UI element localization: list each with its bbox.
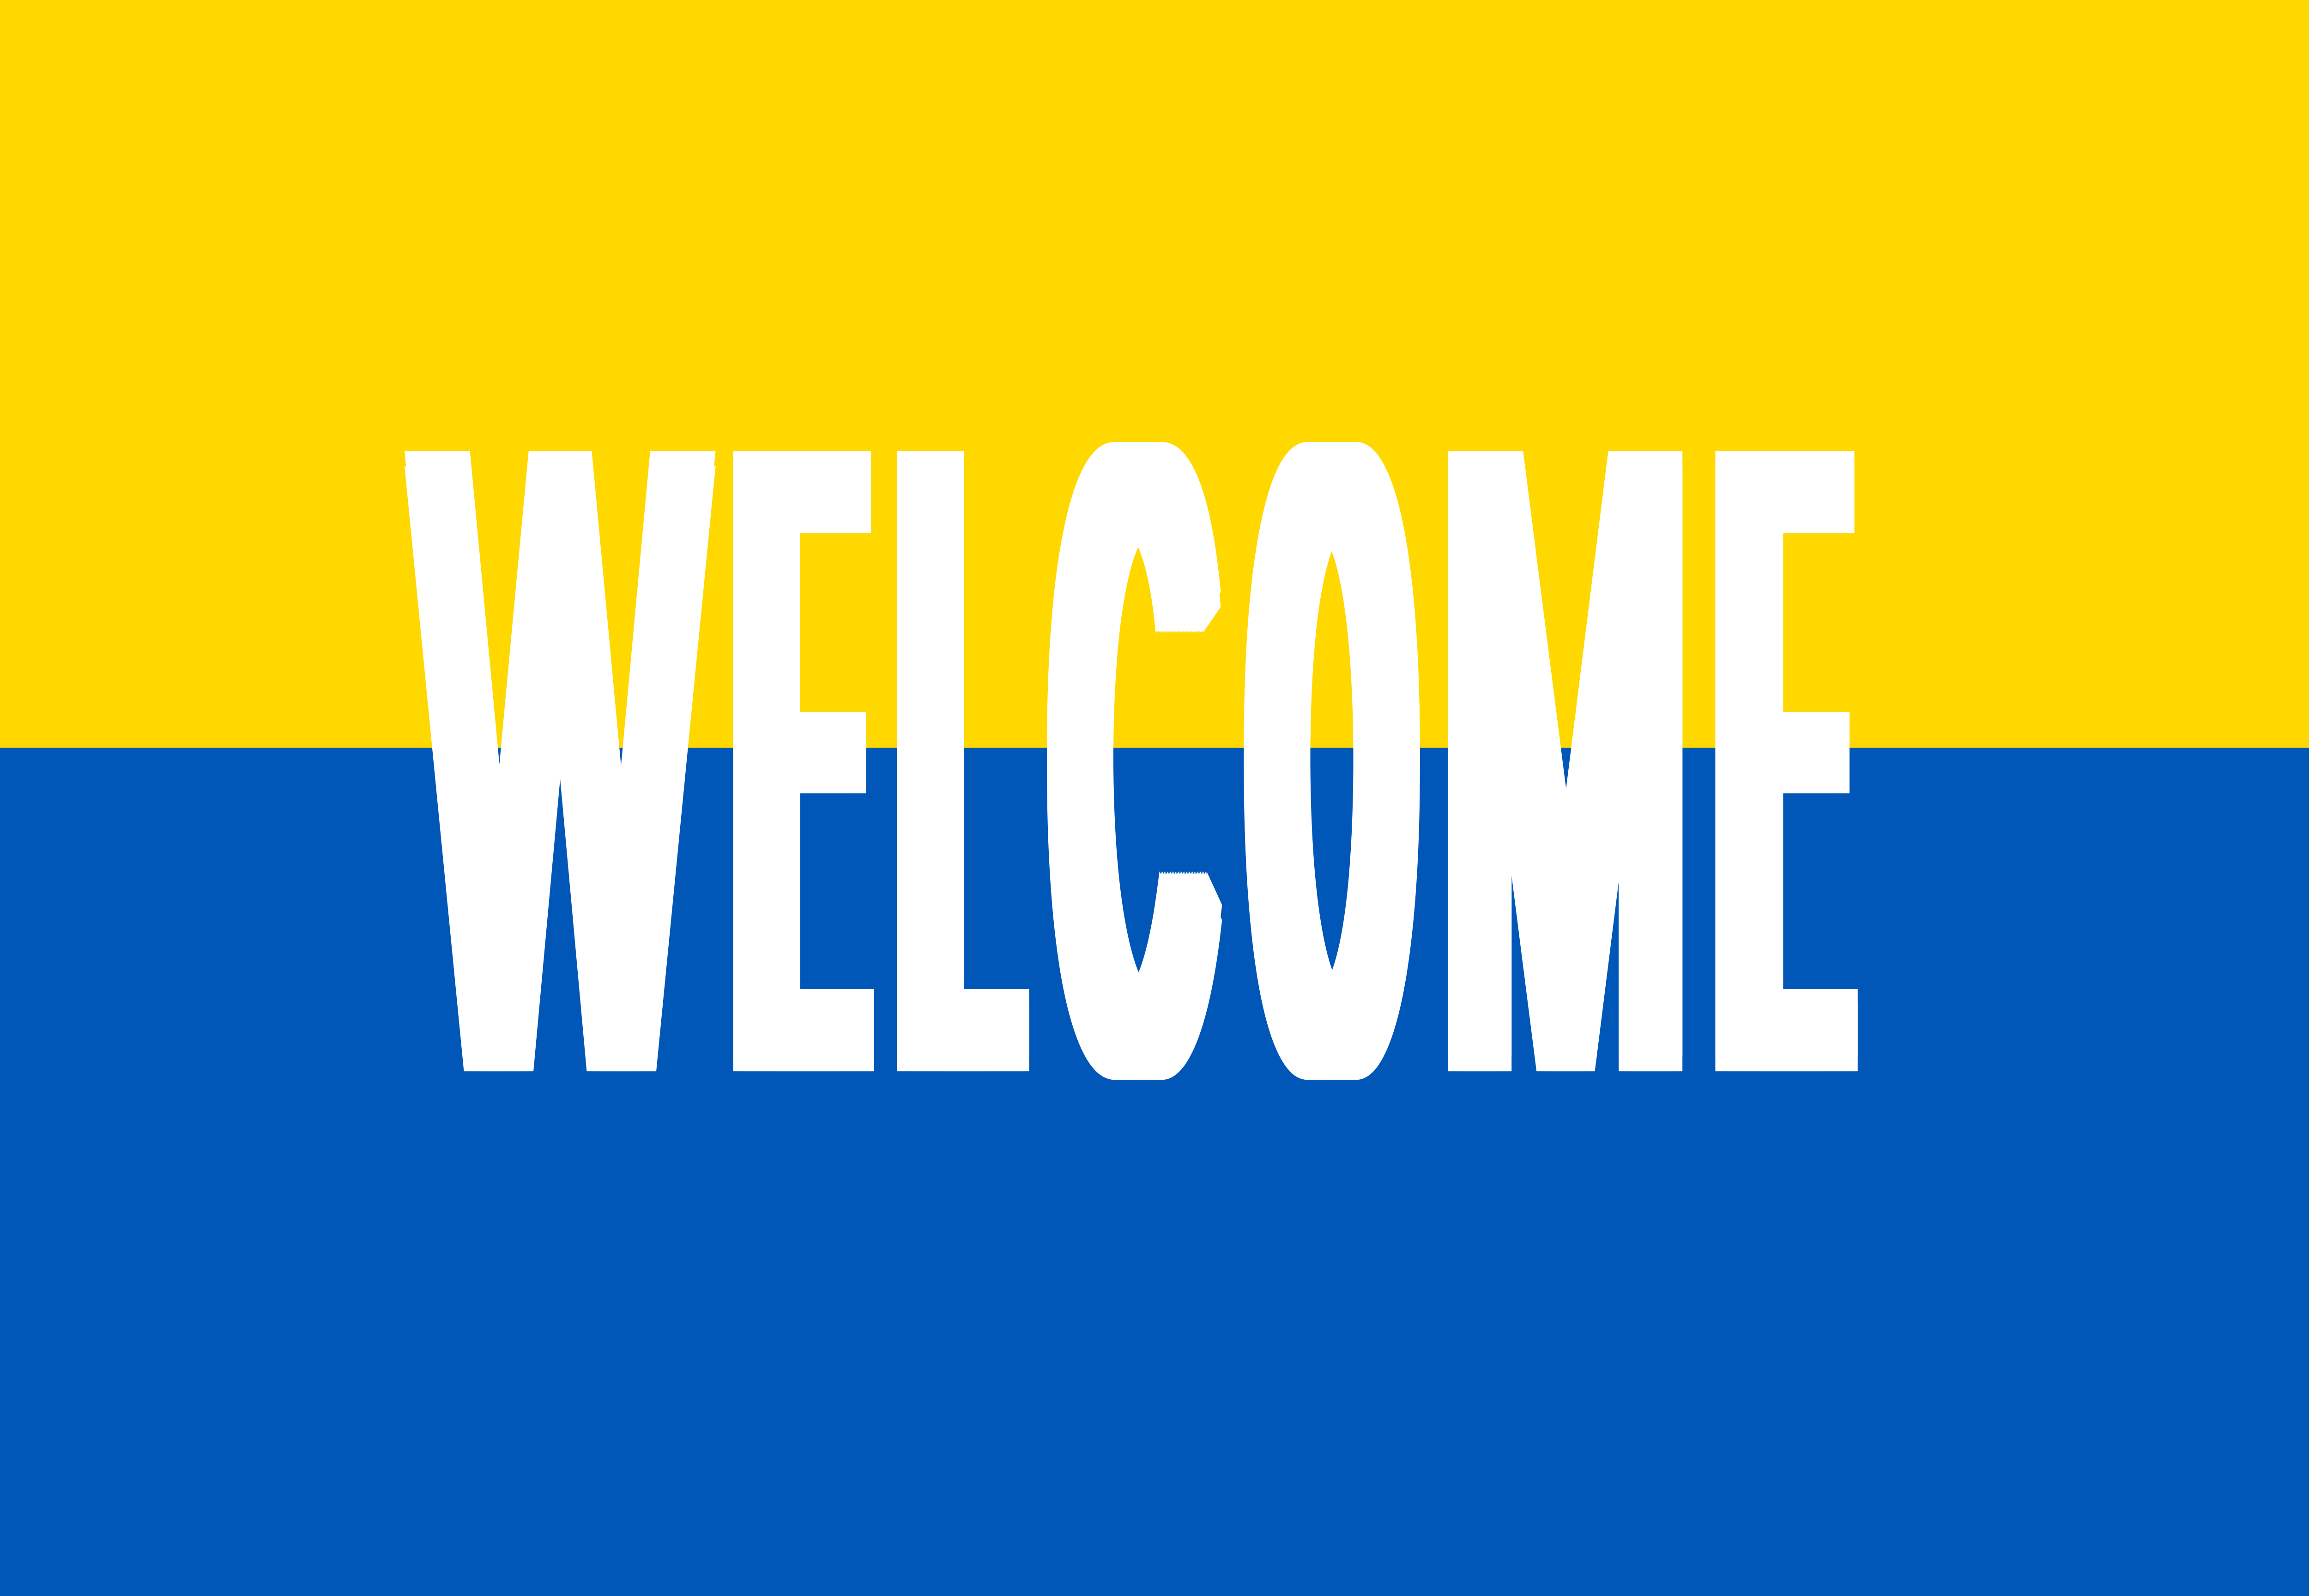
title: WELCOME: E xyxy=(1703,266,1814,1251)
title: WELCOME: W xyxy=(405,266,682,1251)
yellow band xyxy=(0,0,2309,748)
title: WELCOME: L xyxy=(883,266,987,1251)
blue band xyxy=(0,748,2309,1596)
title: WELCOME: M xyxy=(1427,266,1669,1251)
title: WELCOME: E xyxy=(721,266,831,1251)
title: WELCOME: O xyxy=(1236,266,1382,1251)
title: WELCOME: C xyxy=(1038,266,1184,1251)
